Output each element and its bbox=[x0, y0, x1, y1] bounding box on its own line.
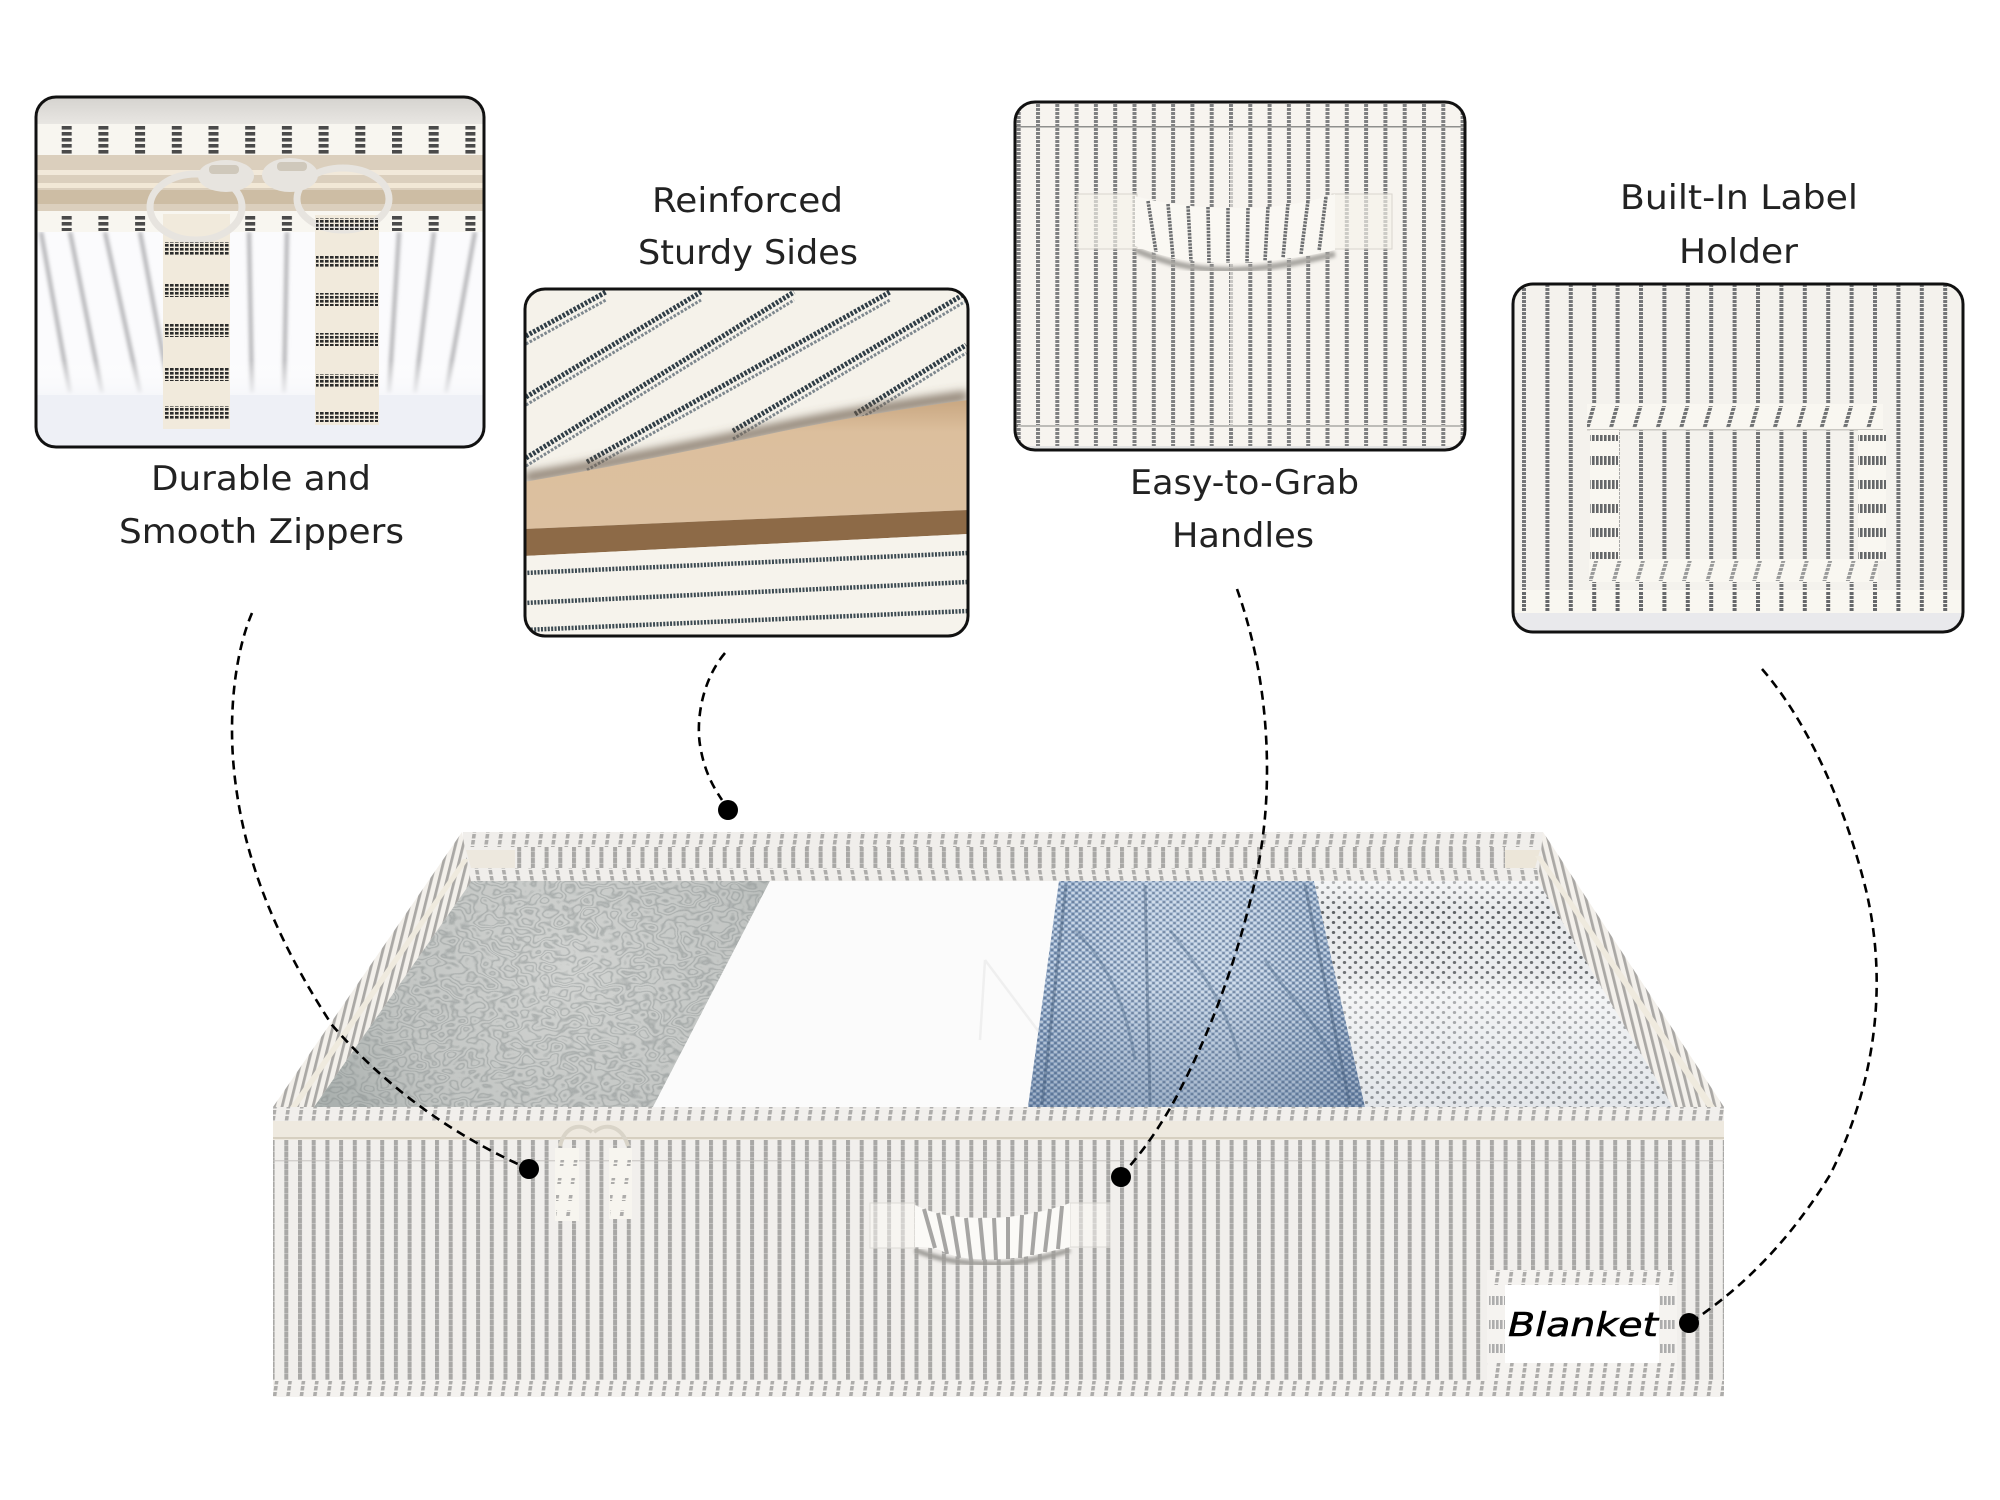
panel: label holder photo bbox=[1512, 283, 1963, 632]
label frame bbox=[1587, 404, 1886, 582]
cork board edge bbox=[524, 510, 968, 556]
dashed connector: label holder bbox=[1679, 669, 1877, 1333]
bottom hem bbox=[273, 1380, 1724, 1397]
panel border: sturdy sides bbox=[525, 289, 968, 636]
dashed connector: handles bbox=[1111, 589, 1267, 1187]
label text: Blanket bbox=[1508, 1305, 1659, 1344]
panel border: label holder bbox=[1513, 284, 1963, 632]
faint centre seam bbox=[1230, 130, 1233, 425]
dashed connector: zippers bbox=[232, 613, 539, 1179]
panel border: handles bbox=[1015, 102, 1465, 450]
grey sherpa fleece blanket bbox=[314, 881, 770, 1107]
blue cable-knit sweater bbox=[1028, 881, 1365, 1107]
heading: sturdy sides: Reinforced bbox=[652, 181, 843, 221]
white duvet bbox=[653, 881, 1059, 1107]
heading: label holder bbox=[1620, 178, 1858, 272]
heading: handles: Easy-to-Grab bbox=[1130, 463, 1359, 503]
heading: handles bbox=[1130, 463, 1359, 556]
shadow under cloth bbox=[524, 396, 968, 478]
heading: label holder: Holder bbox=[1679, 232, 1798, 272]
connector dot: sturdy sides bbox=[718, 800, 738, 820]
diagonal stripes on cloth bbox=[526, 292, 966, 470]
zipper strip bbox=[273, 1121, 1724, 1140]
front panel bbox=[273, 1107, 1724, 1397]
connector dot: zippers bbox=[519, 1159, 539, 1179]
connector dot: handles bbox=[1111, 1167, 1131, 1187]
white label card bbox=[1505, 1285, 1659, 1363]
heading: sturdy sides: Sturdy Sides bbox=[638, 233, 858, 273]
bottom cloth bbox=[524, 534, 968, 636]
back wall bbox=[463, 832, 1543, 881]
label holder on box bbox=[1487, 1270, 1677, 1380]
heading: zippers bbox=[119, 459, 404, 552]
dashed connector: sturdy sides bbox=[699, 653, 738, 820]
left side wall with zipper bbox=[273, 832, 471, 1110]
panel: handles photo bbox=[1014, 101, 1465, 450]
front handle bbox=[870, 1203, 1110, 1264]
heading: handles: Handles bbox=[1172, 516, 1314, 556]
storage box bbox=[273, 832, 1724, 1397]
zipper pull: right bbox=[262, 158, 389, 425]
white waffle-knit blanket bbox=[1314, 881, 1673, 1107]
panel: sturdy sides photo bbox=[524, 288, 968, 636]
connector dot: label holder bbox=[1679, 1313, 1699, 1333]
heading: sturdy sides bbox=[638, 181, 858, 273]
right side wall with zipper bbox=[1535, 832, 1724, 1111]
panel: zippers photo bbox=[25, 96, 484, 447]
handle strap bbox=[1077, 194, 1392, 270]
heading: label holder: Built-In Label bbox=[1620, 178, 1858, 218]
panel border: zippers bbox=[36, 97, 484, 447]
zipper pulls on box bbox=[555, 1127, 632, 1221]
zipper pull: left bbox=[150, 160, 254, 429]
heading: zippers: Smooth Zippers bbox=[119, 512, 404, 552]
cork board face bbox=[524, 400, 968, 529]
heading: zippers: Durable and bbox=[151, 459, 371, 499]
